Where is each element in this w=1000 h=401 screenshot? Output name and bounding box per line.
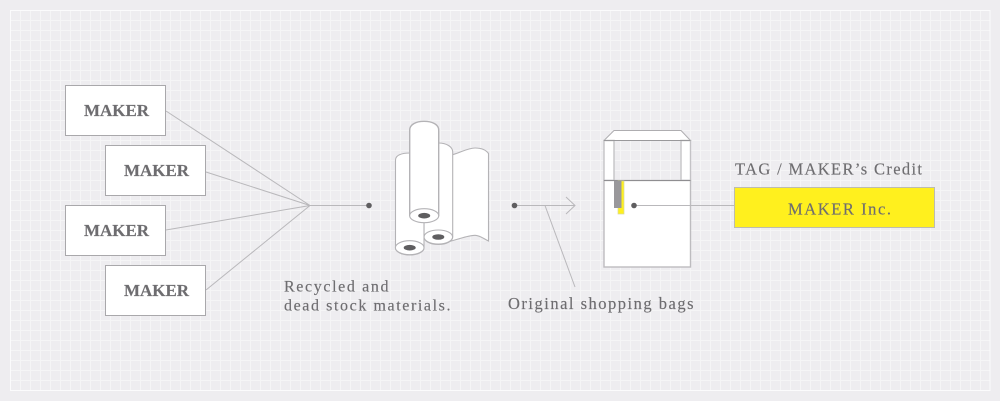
heading: credit: TAG / MAKER’s Credit: [735, 160, 922, 178]
caption: materials: [284, 278, 450, 314]
tag dot: [631, 203, 637, 208]
rear roll: [396, 153, 424, 255]
bag body: [604, 180, 690, 267]
icon: material rolls: [395, 121, 488, 255]
maker box 2: MAKER: [124, 161, 190, 180]
sheet of fabric: [438, 148, 488, 244]
arrow to bag: [515, 197, 575, 287]
grey tag: [614, 181, 622, 208]
maker box 3: MAKER: [84, 221, 150, 240]
maker box 4: [106, 266, 206, 316]
maker box 1: MAKER: [84, 101, 150, 120]
credit box: [734, 188, 934, 228]
caption: bags: Original shopping bags: [508, 294, 694, 313]
maker box 1: [66, 86, 166, 136]
caption: materials: dead stock materials.: [284, 298, 450, 314]
caption: materials: Recycled and: [284, 278, 388, 296]
front roll: [410, 121, 439, 216]
maker box 4: MAKER: [124, 281, 190, 300]
connector lines: makers to hub: [166, 111, 369, 290]
bag top gusset: [604, 130, 690, 140]
bag handles: [604, 140, 690, 180]
icon: shopping bag: [604, 130, 690, 267]
credit box: MAKER Inc.: [788, 200, 891, 218]
hub dot: [366, 203, 372, 208]
yellow tag: [618, 181, 624, 214]
line from tag to credit: [634, 204, 734, 206]
maker box 2: [106, 146, 206, 196]
arrow start dot: [512, 203, 517, 208]
maker box 3: [66, 206, 166, 256]
middle roll: [424, 143, 453, 244]
